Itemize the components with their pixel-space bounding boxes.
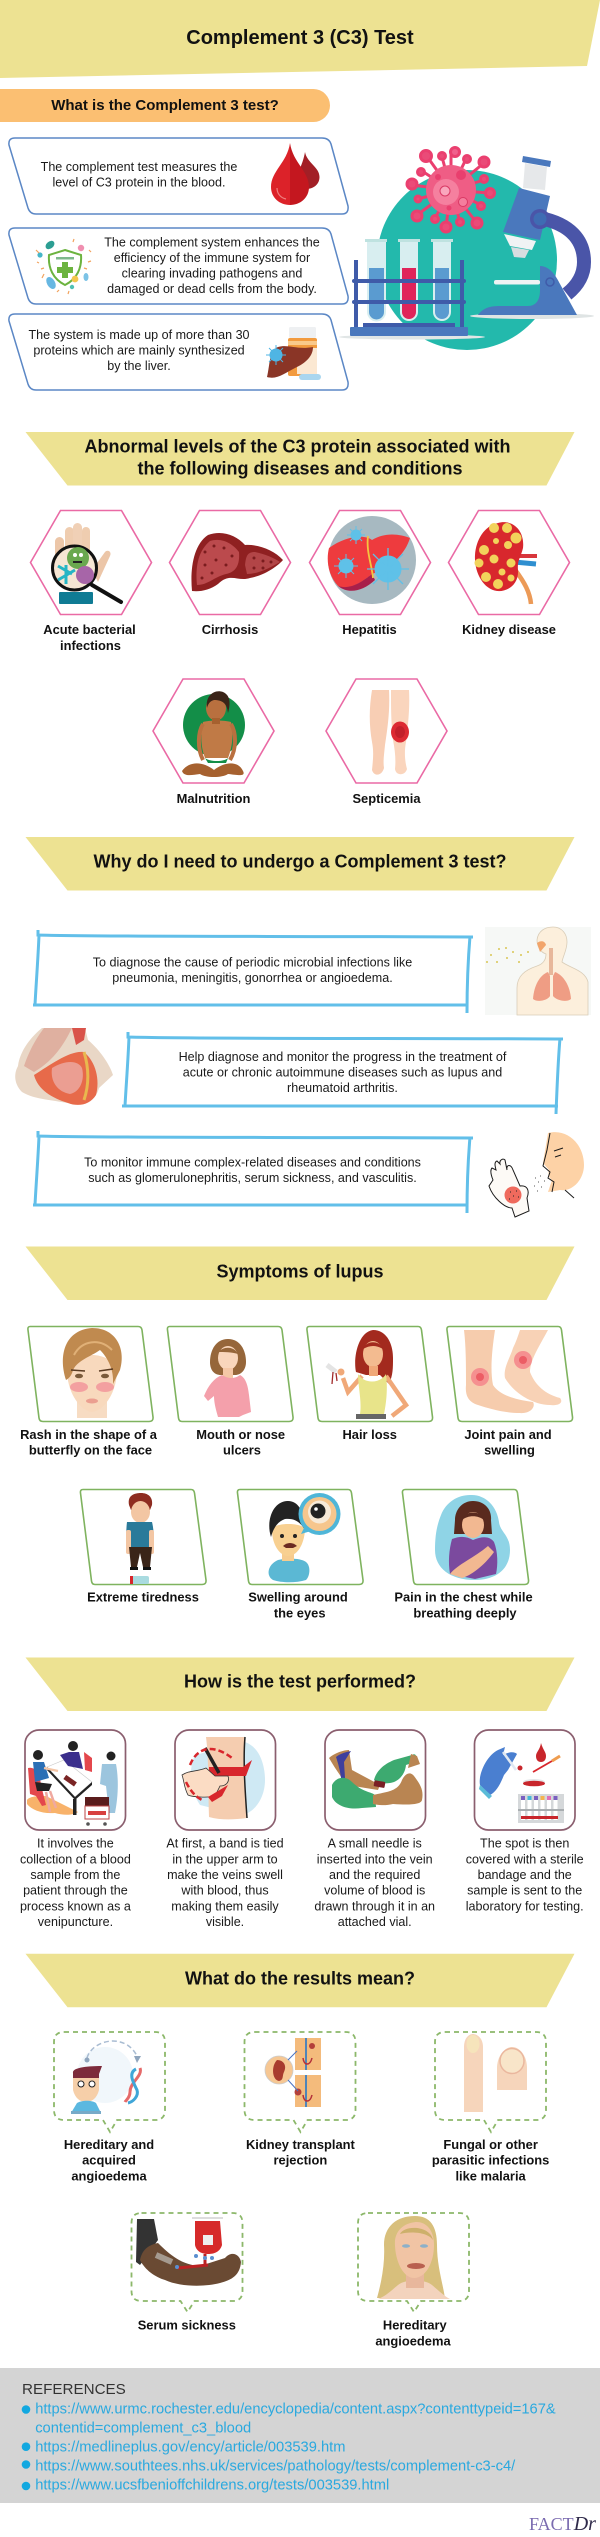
reason: microbial infections: [33, 927, 591, 1015]
icon: clinic scene: [27, 1741, 118, 1826]
step 2 text: in the upper arm to: [172, 1852, 278, 1866]
reason: autoimmune diseases: rheumatoid arthritis.: [287, 1081, 398, 1095]
step 1 text: [20, 1837, 131, 1929]
label: fungal or parasitic infections: Fungal or other: [443, 2137, 538, 2152]
panel: liver proteins: [9, 314, 348, 390]
label: hereditary and acquired angioedema: Hereditary and: [64, 2137, 154, 2152]
section banner: results: What do the results mean?: [185, 1968, 415, 1988]
label: fungal or parasitic infections: like malaria: [455, 2168, 527, 2183]
label: chest pain: [394, 1590, 533, 1620]
section banner: symptoms of lupus: [26, 1246, 574, 1300]
label: kidney transplant rejection: [246, 2137, 356, 2168]
label: butterfly rash: butterfly on the face: [29, 1443, 152, 1458]
label: butterfly rash: Rash in the shape of a: [20, 1427, 158, 1442]
label: malnutrition: Malnutrition: [177, 791, 251, 806]
test tube rack: [339, 239, 485, 340]
references panel: REFERENCES: [22, 2381, 126, 2398]
icon: hand with magnifier: [52, 523, 121, 604]
label: kidney transplant rejection: Kidney transplant: [246, 2137, 356, 2152]
label: acute bacterial infections: infections: [60, 638, 121, 653]
symptom: swelling around the eyes: [237, 1490, 363, 1584]
label: hereditary and acquired angioedema: angioedema: [71, 2168, 147, 2183]
step 2 text: with blood, thus: [180, 1884, 269, 1898]
condition: kidney disease: [448, 510, 570, 614]
step 3: needle: [325, 1730, 426, 1830]
label: fungal or parasitic infections: [432, 2137, 549, 2183]
reference link 1: https://www.urmc.rochester.edu/encyclopedia/content.aspx?contenttypeid=167&: [35, 2401, 556, 2417]
label: hepatitis: Hepatitis: [342, 622, 397, 637]
label: chest pain: Pain in the chest while: [394, 1590, 533, 1605]
result: hereditary angioedema: [358, 2213, 469, 2312]
panel: liver proteins: by the liver.: [107, 359, 171, 373]
label: serum sickness: Serum sickness: [138, 2318, 236, 2333]
step 3 text: inserted into the vein: [317, 1852, 433, 1866]
condition: cirrhosis: [170, 510, 290, 614]
icon: gloved hands drawing blood: [329, 1750, 423, 1809]
result: serum sickness: [132, 2213, 242, 2312]
icon: legs with infection: [370, 690, 409, 775]
reference link 3: https://www.southtees.nhs.uk/services/pathology/tests/complement-c3-c4/: [35, 2458, 516, 2474]
section banner: abnormal levels: Abnormal levels of the C3 protein associated with: [84, 437, 511, 457]
label: kidney disease: Kidney disease: [462, 622, 556, 637]
reason: immune complex diseases: such as glomerulonephritis, serum sickness, and vasculitis.: [88, 1171, 417, 1185]
label: swelling around the eyes: Swelling around: [248, 1590, 348, 1605]
label: extreme tiredness: Extreme tiredness: [87, 1590, 199, 1605]
section banner: why undergo test: Why do I need to undergo a Complement 3 test?: [93, 852, 507, 872]
label: mouth or nose ulcers: ulcers: [223, 1443, 261, 1458]
label: joint pain and swelling: swelling: [484, 1443, 535, 1458]
label: joint pain and swelling: Joint pain and: [464, 1427, 552, 1442]
panel: blood level: [9, 138, 348, 214]
reason: autoimmune diseases: [122, 1032, 563, 1114]
label: hereditary angioedema: angioedema: [375, 2333, 451, 2348]
condition: malnutrition: [153, 679, 274, 783]
step 3 text: [314, 1837, 435, 1929]
step 1 text: patient through the: [23, 1884, 128, 1898]
panel: immune system: The complement system enhances the: [104, 236, 320, 250]
icon: woman with hair in hand: [327, 1330, 406, 1419]
step 2 text: make the veins swell: [167, 1868, 283, 1882]
step 3 text: A small needle is: [328, 1837, 422, 1851]
label: acute bacterial infections: Acute bacterial: [43, 622, 136, 637]
label: joint pain and swelling: [464, 1427, 552, 1458]
label: hereditary angioedema: [375, 2318, 451, 2348]
icon: boy and DNA: [71, 2041, 141, 2114]
label: swelling around the eyes: [248, 1590, 348, 1620]
reason: immune complex diseases: [33, 1131, 584, 1217]
label: mouth or nose ulcers: [196, 1427, 285, 1458]
symptom: chest pain: [402, 1490, 529, 1584]
result: fungal or parasitic infections: [435, 2032, 546, 2132]
step 3 text: volume of blood is: [324, 1884, 425, 1898]
heading: what is the test: [0, 89, 330, 122]
step 3 text: drawn through it in an: [314, 1899, 435, 1913]
panel: immune system: [9, 228, 348, 304]
section banner: why undergo test: [26, 837, 574, 890]
icon: shield and pathogens: [36, 239, 91, 294]
symptom: extreme tiredness: [80, 1490, 206, 1584]
label: acute bacterial infections: [43, 622, 136, 653]
icon: swollen feet: [464, 1330, 561, 1413]
reference link 4: https://www.ucsfbenioffchildrens.org/tests/003539.html: [35, 2477, 389, 2493]
label: hair loss: Hair loss: [342, 1427, 397, 1442]
icon: glove, petri dish and tubes: [479, 1743, 564, 1823]
icon: woman with facial swelling: [377, 2216, 450, 2299]
section banner: abnormal levels: the following diseases and conditions: [137, 458, 463, 478]
panel: immune system: clearing invading pathogens and: [122, 267, 302, 281]
icon: inflamed heart: [15, 1028, 113, 1105]
step 2 text: [166, 1837, 284, 1929]
label: mouth or nose ulcers: Mouth or nose: [196, 1427, 285, 1442]
step 4 text: [466, 1837, 584, 1913]
step 1 text: sample from the: [30, 1868, 120, 1882]
icon: arm with band: [182, 1737, 265, 1819]
label: septicemia: Septicemia: [352, 791, 421, 806]
result: kidney transplant rejection: [244, 2032, 356, 2132]
reason: immune complex diseases: To monitor immune complex-related diseases and conditions: [84, 1156, 421, 1170]
reference link 1: [22, 2401, 556, 2436]
condition: acute bacterial infections: [30, 510, 152, 614]
reason: autoimmune diseases: Help diagnose and monitor the progress in the treatment of: [179, 1050, 507, 1064]
step 2 text: making them easily: [171, 1899, 279, 1913]
reference link 2: https://medlineplus.gov/ency/article/003539.htm: [35, 2439, 345, 2455]
symptom: hair loss: [307, 1326, 433, 1422]
label: chest pain: breathing deeply: [413, 1605, 517, 1620]
symptom: butterfly rash: [28, 1326, 153, 1422]
step 2 text: At first, a band is tied: [166, 1837, 284, 1851]
reason: microbial infections: To diagnose the cause of periodic microbial infections like: [93, 956, 412, 970]
icon: coughing face and hand rash: [489, 1132, 584, 1217]
icon: blood drops: [271, 143, 320, 205]
section banner: results: [26, 1954, 574, 2007]
logo: FactDr: FACTDr: [529, 2513, 596, 2535]
section banner: symptoms of lupus: Symptoms of lupus: [216, 1262, 384, 1282]
step 1 text: process known as a: [20, 1899, 131, 1913]
section banner: abnormal levels: [26, 432, 574, 486]
label: swelling around the eyes: the eyes: [274, 1605, 326, 1620]
icon: kidney anatomy: [265, 2038, 321, 2107]
step 1: blood collection: [25, 1730, 126, 1830]
panel: blood level: The complement test measures the: [41, 160, 237, 174]
virus: [407, 148, 494, 232]
icon: arm with blood bag: [136, 2218, 241, 2286]
references panel: [0, 2368, 600, 2503]
icon: woman holding chest: [435, 1495, 510, 1580]
microscope: [470, 156, 594, 319]
icon: liver with viruses: [328, 516, 416, 604]
icon: lungs and breathing: [485, 927, 591, 1015]
symptom: mouth or nose ulcers: [167, 1326, 293, 1422]
label: hereditary and acquired angioedema: acquired: [82, 2153, 136, 2168]
step 2: tourniquet: [175, 1730, 276, 1830]
section banner: how is the test performed: [26, 1658, 574, 1711]
symptom: joint pain and swelling: [447, 1326, 573, 1422]
reference link 1: contentid=complement_c3_blood: [35, 2420, 251, 2436]
label: cirrhosis: Cirrhosis: [202, 622, 258, 637]
icon: infected fingernails: [464, 2034, 527, 2112]
step 3 text: and the required: [329, 1868, 420, 1882]
panel: immune system: efficiency of the immune system for: [114, 251, 310, 265]
condition: septicemia: [326, 679, 447, 783]
label: hereditary angioedema: Hereditary: [383, 2318, 448, 2333]
icon: man with eye bubble: [269, 1493, 340, 1582]
heading: what is the test: What is the Complement 3 test?: [51, 97, 279, 114]
condition: hepatitis: [310, 510, 430, 614]
step 4 text: bandage and the: [478, 1868, 572, 1882]
label: hereditary and acquired angioedema: [64, 2137, 154, 2183]
panel: immune system: damaged or dead cells from the body.: [107, 282, 317, 296]
panel: liver proteins: The system is made up of more than 30: [28, 328, 250, 342]
step 3 text: attached vial.: [338, 1915, 412, 1929]
label: kidney transplant rejection: rejection: [274, 2153, 327, 2168]
reason: microbial infections: pneumonia, meningitis, gonorrhea or angioedema.: [112, 971, 393, 985]
step 1 text: venipuncture.: [38, 1915, 113, 1929]
step 4 text: covered with a sterile: [466, 1852, 584, 1866]
result: hereditary and acquired angioedema: [54, 2032, 165, 2132]
reason: autoimmune diseases: acute or chronic autoimmune diseases such as lupus and: [183, 1066, 502, 1080]
section banner: how is the test performed: How is the test performed?: [184, 1672, 416, 1692]
label: butterfly rash: [20, 1427, 158, 1458]
teal circle: [377, 170, 557, 350]
step 4 text: sample is sent to the: [467, 1884, 582, 1898]
step 4 text: laboratory for testing.: [466, 1899, 584, 1913]
illustration: laboratory: [339, 148, 594, 350]
icon: kidney: [474, 522, 537, 604]
step 1 text: It involves the: [37, 1837, 114, 1851]
title banner: [0, 0, 600, 78]
step 2 text: visible.: [206, 1915, 244, 1929]
step 1 text: collection of a blood: [20, 1852, 131, 1866]
icon: liver and medicine: [266, 327, 321, 380]
label: fungal or parasitic infections: parasitic infections: [432, 2153, 549, 2168]
icon: malnourished child: [182, 691, 245, 777]
step 4: sample to laboratory: [474, 1730, 575, 1830]
panel: blood level: level of C3 protein in the blood.: [53, 176, 225, 190]
icon: face with rash: [63, 1328, 122, 1418]
step 4 text: The spot is then: [480, 1837, 569, 1851]
title banner: Complement 3 (C3) Test: [186, 27, 414, 49]
icon: tired boy: [126, 1493, 154, 1584]
icon: woman in pink: [204, 1339, 251, 1417]
icon: cirrhotic liver: [191, 533, 283, 591]
panel: liver proteins: proteins which are mainly synthesized: [33, 344, 245, 358]
